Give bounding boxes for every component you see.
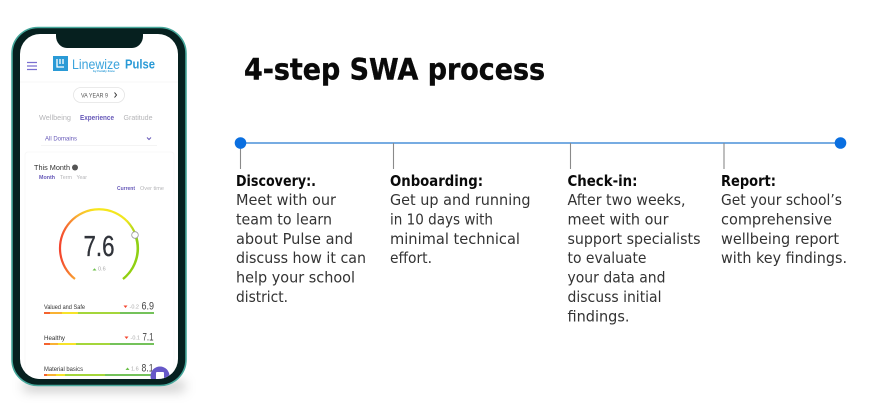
menu icon <box>27 62 37 70</box>
score card: Month <box>39 175 56 181</box>
step 1: discovery: team to learn <box>236 211 332 228</box>
score card: This Month <box>34 163 70 172</box>
metric: healthy: Healthy <box>44 336 65 342</box>
phone shadow <box>24 382 184 390</box>
step 3: check-in: support specialists <box>568 231 700 248</box>
gauge: 7.6 <box>84 231 114 263</box>
tabs: Gratitude <box>124 113 152 122</box>
step 3: check-in: to evaluate <box>568 250 646 267</box>
timeline start dot <box>235 137 246 149</box>
step 3: check-in: discuss initial <box>568 289 662 306</box>
score card <box>24 164 174 379</box>
metric: material basics: 1.6 <box>131 366 139 372</box>
step 2: onboarding: Get up and running <box>390 192 530 209</box>
score card: Term <box>60 175 72 181</box>
step 4: report: wellbeing report <box>721 231 839 248</box>
metric: material basics <box>44 364 152 376</box>
metric: healthy <box>44 333 154 345</box>
app logo: Linewize <box>72 56 120 72</box>
step 3: check-in: your data and <box>568 270 666 287</box>
step 1: discovery <box>236 172 366 306</box>
phone screen <box>20 34 178 392</box>
step 2: onboarding: minimal technical <box>390 231 520 248</box>
step 4: report <box>721 172 847 267</box>
tabs: Experience <box>80 113 114 122</box>
step 1: discovery: help your school <box>236 270 355 287</box>
tabs: Wellbeing <box>39 113 71 122</box>
app logo: by Family Zone <box>93 69 115 73</box>
domain dropdown <box>41 136 157 146</box>
app logo <box>53 56 155 73</box>
step 1: discovery: discuss how it can <box>236 250 366 267</box>
step 3: check-in: After two weeks, <box>568 192 686 209</box>
title: 4-step SWA process <box>244 52 545 86</box>
score card: Year <box>76 175 87 181</box>
metric: valued and safe <box>44 302 154 314</box>
timeline <box>235 137 846 169</box>
metric: valued and safe: -0.2 <box>130 304 139 310</box>
phone notch <box>56 34 143 48</box>
step 1: discovery: about Pulse and <box>236 231 353 248</box>
gauge <box>60 209 138 279</box>
step 3: check-in: findings. <box>568 308 630 325</box>
score card: Over time <box>140 186 164 192</box>
chat button <box>150 366 170 379</box>
step tick marks <box>240 143 724 169</box>
score card: Current <box>117 186 135 192</box>
metric: healthy: -0.1 <box>130 336 140 342</box>
step 2: onboarding: in 10 days with <box>390 211 493 228</box>
step 1: discovery: Meet with our <box>236 192 337 209</box>
step 3: check-in: Check-in: <box>568 172 638 190</box>
year selector <box>74 88 124 102</box>
step 3: check-in: meet with our <box>568 211 669 228</box>
domain dropdown: All Domains <box>45 136 77 142</box>
metric: valued and safe: Valued and Safe <box>44 305 86 311</box>
step 2: onboarding: Onboarding: <box>390 172 483 190</box>
step 2: onboarding: effort. <box>390 250 432 267</box>
year selector: VA YEAR 9 <box>81 94 109 100</box>
gauge: 0.6 <box>98 266 106 272</box>
metric: valued and safe: 6.9 <box>142 300 154 312</box>
step 4: report: with key findings. <box>721 250 847 267</box>
metric: material basics: 8.1 <box>142 362 154 374</box>
info icon <box>72 164 78 170</box>
timeline end dot <box>835 137 846 149</box>
step 2: onboarding <box>390 172 530 267</box>
step 4: report: Get your school’s <box>721 192 842 209</box>
step 1: discovery: district. <box>236 289 288 306</box>
tabs <box>39 114 152 122</box>
app logo: Pulse <box>125 56 155 72</box>
phone mockup <box>12 28 186 392</box>
metric: material basics: Material basics <box>44 367 83 373</box>
phone body <box>12 28 186 386</box>
step 4: report: comprehensive <box>721 211 832 228</box>
step 3: check-in <box>568 172 700 325</box>
metric: healthy: 7.1 <box>142 332 154 344</box>
step 4: report: Report: <box>721 172 776 190</box>
step 1: discovery: Discovery:. <box>236 172 316 190</box>
